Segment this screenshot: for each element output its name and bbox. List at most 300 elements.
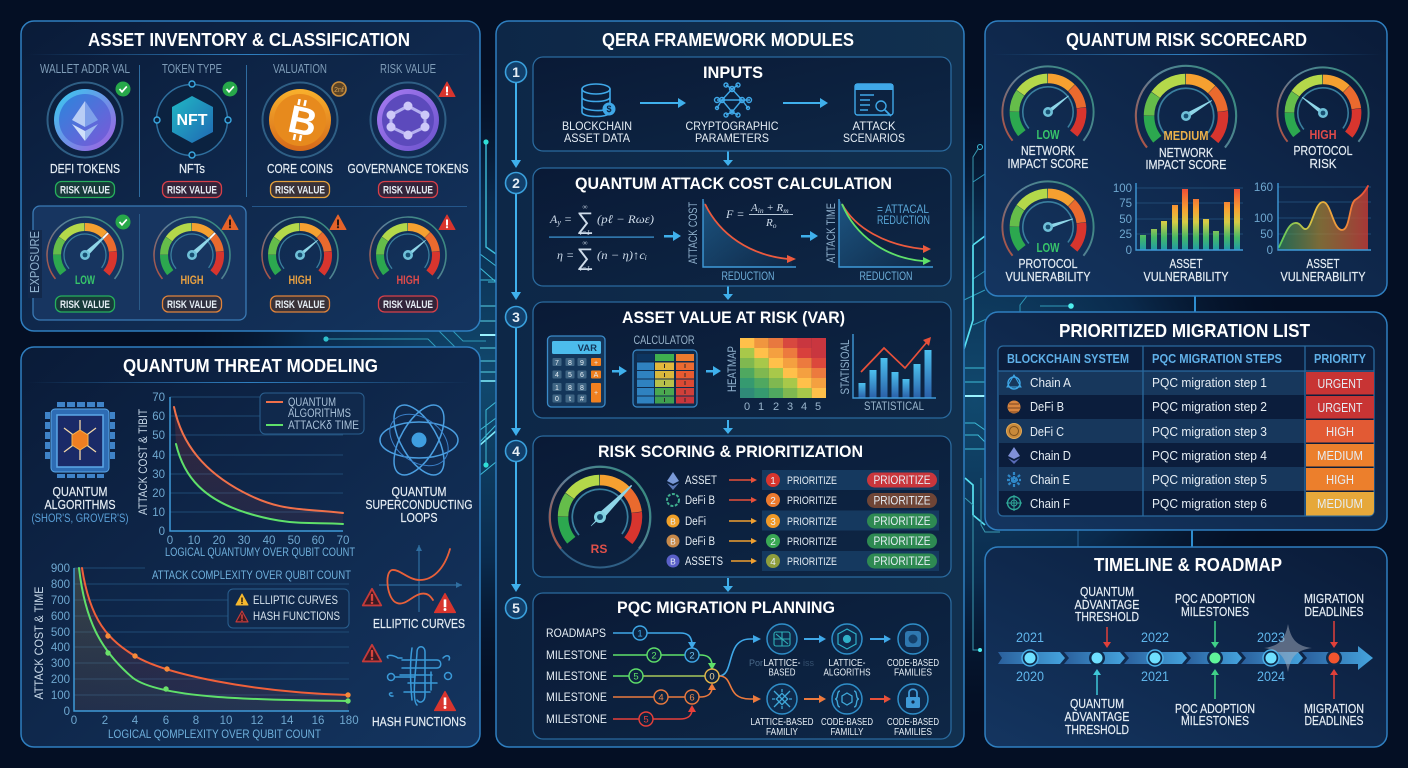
- milestone nodes: 2: [651, 650, 657, 662]
- icon: database: $: [606, 104, 612, 114]
- labels: [562, 119, 905, 145]
- chart: attack cost: o: [773, 221, 777, 230]
- milestone: quantum advantage threshold: THRESHOLD: [1075, 609, 1139, 624]
- gauge: protocol risk: [1259, 49, 1387, 177]
- row: chain d: [1008, 444, 1374, 466]
- row: chain a: PQC migration step 1: [1152, 375, 1267, 390]
- label: superconducting loops: SUPERCONDUCTING: [366, 497, 472, 512]
- row 1: PRIORITIZE: [787, 475, 837, 487]
- milestone: 2022-2021: 2022: [1141, 630, 1169, 645]
- chart: attack time: = ATTACAL: [877, 204, 930, 216]
- arrows: top row: [804, 635, 891, 643]
- milestone: quantum advantage threshold: ADVANTAGE: [1074, 597, 1140, 612]
- chart: attack complexity: 4: [132, 715, 139, 727]
- milestone: pqc adoption: MILESTONES: [1181, 713, 1249, 728]
- heading: TIMELINE & ROADMAP: [1094, 554, 1282, 575]
- label: superconducting loops: LOOPS: [400, 510, 438, 525]
- formula: =: [561, 212, 572, 226]
- formula: ∞: [582, 203, 588, 211]
- icon: calculator: 9: [580, 360, 584, 367]
- heatmap: 5: [815, 401, 821, 413]
- formula: ∞: [582, 239, 588, 247]
- legend: chart 2: ELLIPTIC CURVES: [253, 593, 338, 607]
- label: quantum algorithms: [32, 484, 128, 525]
- icon: calculator: A: [594, 372, 599, 379]
- icon: calculator: 4: [555, 372, 559, 379]
- gauge: protocol vulnerability: LOW: [1036, 241, 1060, 255]
- gauge: network impact low: IMPACT SCORE: [1008, 156, 1089, 171]
- milestone: migration deadlines: MIGRATION: [1304, 591, 1364, 606]
- chart: attack complexity: 0: [71, 715, 77, 727]
- module 5: pqc migration planning: [533, 593, 951, 739]
- chart: attack cost over qubit count: 30: [152, 469, 165, 481]
- milestone: quantum advantage threshold: THRESHOLD: [1065, 722, 1129, 737]
- chart: attack cost over qubit count: 40: [263, 535, 275, 547]
- heading: ASSET VALUE AT RISK (VAR): [622, 308, 845, 327]
- milestone: migration deadlines: MIGRATION: [1304, 701, 1364, 716]
- step numbers: 4: [512, 443, 520, 459]
- chart: attack complexity: 200: [51, 674, 70, 686]
- icon: elliptic curve: [363, 545, 462, 612]
- heading: PQC MIGRATION PLANNING: [617, 598, 835, 617]
- label: superconducting loops: QUANTUM: [392, 484, 446, 499]
- row: chain f: Chain F: [1030, 496, 1070, 511]
- labels: top row: [749, 658, 939, 678]
- icons: pqc families bottom row: [767, 684, 928, 714]
- chart: attack cost: A: [751, 202, 758, 214]
- gauge: high red: HIGH: [396, 273, 420, 287]
- row: defi c: [1006, 420, 1374, 442]
- formula: (pℓ − Rωε): [597, 212, 654, 226]
- chart: asset vulnerability bars: 100: [1113, 183, 1132, 195]
- heading: threat modeling: QUANTUM THREAT MODELING: [123, 355, 378, 376]
- chart: attack complexity: 180: [339, 715, 359, 727]
- row: chain e: HIGH: [1326, 472, 1354, 487]
- labels: PARAMETERS: [695, 131, 769, 145]
- table header: BLOCKCHAIN SYSTEM: [1007, 352, 1129, 366]
- labels: bottom row: LATTICE-BASED: [750, 717, 814, 728]
- icon: calculator: 7: [555, 360, 559, 367]
- milestone: pqc adoption: PQC ADOPTION: [1175, 591, 1255, 606]
- formula: A: [550, 212, 557, 226]
- statistical chart: STATISTICAL: [864, 401, 925, 413]
- icon: quantum chip: [45, 402, 115, 478]
- formula: ∑: [576, 208, 594, 235]
- chart: attack cost over qubit count: 40: [152, 450, 165, 462]
- step numbers: 1: [512, 64, 520, 80]
- row: defi b: [1008, 396, 1374, 418]
- milestone: 2023-2024: 2024: [1257, 669, 1285, 684]
- row 5: B: [670, 556, 676, 566]
- gauge: network impact medium: MEDIUM: [1164, 129, 1208, 143]
- chart: attack complexity: 800: [51, 579, 70, 591]
- gauge: protocol risk: PROTOCOL: [1294, 143, 1352, 158]
- icon: calculator: VAR: [578, 343, 597, 354]
- legend: chart 1: [260, 393, 364, 434]
- labels: ATTACK: [852, 119, 896, 133]
- milestone nodes: [629, 626, 719, 726]
- row: defi b: URGENT: [1318, 400, 1363, 415]
- row: chain d: MEDIUM: [1317, 448, 1363, 463]
- milestone: migration deadlines: DEADLINES: [1304, 713, 1364, 728]
- chart: asset vulnerability area: [1254, 182, 1371, 284]
- formula: ∑: [576, 244, 594, 271]
- asset names: GOVERNANCE TOKENS: [348, 161, 469, 176]
- chart: attack cost: R: [766, 217, 773, 229]
- module 4: risk scoring: [529, 436, 951, 588]
- statistical chart: STATISIOAL: [840, 339, 852, 394]
- chart: attack time: REDUCTION: [860, 271, 912, 283]
- legend: chart 1: ALGORITHMS: [288, 408, 351, 420]
- gauge: high orange: HIGH: [180, 273, 204, 287]
- legend: chart 1: ATTACKδ TIME: [288, 420, 359, 432]
- row 1: 1: [770, 476, 776, 487]
- chart: asset vulnerability area: 160: [1254, 182, 1273, 194]
- heading: qera framework: QERA FRAMEWORK MODULES: [602, 29, 854, 50]
- calculator table: [633, 335, 697, 407]
- milestone labels: MILESTONE: [546, 648, 607, 662]
- row 3: B: [670, 516, 676, 526]
- heading: asset inventory: ASSET INVENTORY & CLASSIFICATION: [88, 29, 410, 50]
- formula: i=1: [580, 229, 590, 237]
- table header: [1007, 352, 1367, 366]
- gauge: low: LOW: [75, 273, 95, 287]
- milestone: 2022-2021: 2021: [1141, 669, 1169, 684]
- row: chain f: PQC migration step 6: [1152, 496, 1267, 511]
- migration table: [998, 346, 1374, 516]
- chart: attack cost over qubit count: [136, 392, 356, 559]
- gauge: high: [247, 202, 353, 308]
- risk value pills row 2: RISK VALUE: [275, 299, 325, 311]
- icon: calculator: 6: [580, 372, 584, 379]
- milestone nodes: 4: [658, 692, 664, 704]
- legend: chart 2: HASH FUNCTIONS: [253, 609, 340, 623]
- chart: attack complexity: 8: [193, 715, 199, 727]
- heatmap: [727, 338, 826, 413]
- row 5: PRIORITIZE: [874, 556, 931, 568]
- chart: attack complexity: 300: [51, 658, 70, 670]
- row 5: [666, 554, 937, 568]
- labels: top row: iss: [803, 658, 814, 668]
- priority rows: [666, 470, 939, 571]
- formula: i=1: [580, 265, 590, 273]
- gauge: network impact medium: IMPACT SCORE: [1146, 157, 1227, 172]
- row 1: ASSET: [685, 475, 717, 487]
- module 3: asset value at risk: [533, 302, 951, 418]
- gauge: low: [32, 202, 138, 308]
- column labels: WALLET ADDR VAL: [40, 62, 130, 76]
- chart: attack cost over qubit count: 60: [312, 535, 324, 547]
- row: chain a: Chain A: [1030, 375, 1071, 390]
- row 5: ASSETS: [685, 556, 723, 568]
- chart: asset vulnerability area: VULNERABILITY: [1280, 269, 1366, 284]
- chart: attack cost over qubit count: 30: [238, 535, 250, 547]
- labels: top row: BASED: [768, 668, 796, 678]
- chart: asset vulnerability bars: 0: [1126, 245, 1132, 257]
- chart: attack cost over qubit count: 20: [213, 535, 225, 547]
- risk value pills row 2: RISK VALUE: [383, 299, 433, 311]
- chart: attack complexity: 6: [163, 715, 169, 727]
- chart: asset vulnerability bars: 25: [1119, 229, 1132, 241]
- icon: atom: [380, 397, 458, 483]
- icon: core coin: 2nf: [334, 87, 344, 94]
- arrow: [612, 366, 627, 376]
- circuit traces right gutter: [964, 144, 1195, 652]
- statistical chart: [840, 334, 936, 413]
- legend: chart 1: QUANTUM: [288, 397, 336, 409]
- chart: attack cost over qubit count: ATTACK COST & TIBIT: [136, 408, 150, 515]
- sparkle: [1264, 624, 1312, 672]
- legend: chart 2: [228, 589, 349, 628]
- row 4: B: [670, 536, 676, 546]
- arrow: [640, 98, 686, 108]
- row: chain f: MEDIUM: [1317, 496, 1363, 511]
- milestone: pqc adoption: MILESTONES: [1181, 604, 1249, 619]
- labels: bottom row: FAMILLY: [830, 727, 864, 738]
- formula: [549, 203, 654, 273]
- icon: calculator: 8: [580, 385, 584, 392]
- chart: attack cost over qubit count: LOGICAL QUANTUMY OVER QUBIT COUNT: [165, 545, 356, 559]
- chart: attack cost: + R: [764, 202, 784, 214]
- milestone labels: MILESTONE: [546, 690, 607, 704]
- icon: core coin: [262, 82, 346, 158]
- milestone: 2022-2021: [1141, 630, 1169, 684]
- labels: bottom row: FAMILIES: [894, 727, 932, 738]
- row 1: [667, 472, 937, 490]
- labels: top row: ALGORITHS: [824, 668, 871, 678]
- chart: attack cost over qubit count: 70: [152, 392, 165, 404]
- row: chain e: Chain E: [1030, 472, 1070, 487]
- asset names: [50, 161, 469, 176]
- milestone nodes: 1: [637, 628, 643, 640]
- formula: η =: [557, 248, 574, 262]
- column labels: [40, 62, 436, 76]
- icon: calculator: 8: [568, 360, 572, 367]
- row 4: 2: [770, 537, 776, 548]
- labels: top row: Por: [749, 658, 763, 668]
- icon: hash functions: [363, 645, 455, 710]
- chart: attack complexity: 900: [51, 563, 70, 575]
- row 5: 4: [770, 557, 776, 568]
- row 4: [666, 534, 937, 548]
- chart: attack complexity: 500: [51, 627, 70, 639]
- milestone: quantum advantage threshold: ADVANTAGE: [1064, 709, 1130, 724]
- risk score gauge: RS: [591, 542, 607, 556]
- label: quantum algorithms: ALGORITHMS: [44, 497, 116, 512]
- milestone: pqc adoption: PQC ADOPTION: [1175, 701, 1255, 716]
- calculator table: CALCULATOR: [634, 335, 694, 347]
- row: defi c: PQC migration step 3: [1152, 424, 1267, 439]
- chart: asset vulnerability bars: 50: [1119, 214, 1132, 226]
- risk score gauge: [529, 446, 671, 588]
- row: chain a: URGENT: [1318, 376, 1363, 391]
- chart: attack cost over qubit count: 60: [152, 411, 165, 423]
- gauge: network impact low: LOW: [1036, 128, 1060, 142]
- row 2: 2: [770, 496, 776, 507]
- chart: attack complexity: 16: [312, 715, 324, 727]
- gauge: high orange: [139, 202, 245, 308]
- chart: attack complexity: 600: [51, 611, 70, 623]
- chart: attack cost: F =: [725, 207, 744, 221]
- labels: top row: LATTICE-: [764, 658, 800, 669]
- gauge: high red: [355, 202, 461, 308]
- milestone labels: ROADMAPS: [546, 626, 606, 640]
- step numbers: 2: [512, 175, 520, 191]
- column labels: RISK VALUE: [380, 62, 436, 76]
- heatmap: 4: [801, 401, 807, 413]
- milestone nodes: 0: [709, 672, 715, 682]
- gauge: high: HIGH: [288, 273, 312, 287]
- labels: BLOCKCHAIN: [562, 119, 632, 133]
- row: defi b: DeFi B: [1030, 399, 1064, 414]
- heatmap: 0: [744, 401, 750, 413]
- chart: attack time: REDUCTION: [877, 215, 930, 227]
- icon: calculator: t: [569, 396, 571, 403]
- milestone: 2020-2021: 2021: [1016, 630, 1044, 645]
- milestone: quantum advantage threshold: QUANTUM: [1080, 584, 1134, 599]
- icons: pqc families top row: [767, 624, 928, 654]
- chart: attack complexity: 14: [281, 715, 294, 727]
- icon: calculator: #: [580, 396, 584, 403]
- labels: CRYPTOGRAPHIC: [686, 119, 779, 133]
- icon: governance token: [370, 82, 455, 158]
- icon: calculator: 8: [568, 385, 572, 392]
- label: elliptic curves: ELLIPTIC CURVES: [373, 616, 465, 631]
- row: chain f: [1006, 492, 1374, 516]
- chart: asset vulnerability bars: VULNERABILITY: [1144, 269, 1229, 284]
- chart: attack complexity: ATTACK COST & TIME: [32, 586, 46, 700]
- exposure box: [27, 206, 246, 320]
- row 2: DeFi B: [685, 495, 715, 507]
- panel: quantum risk scorecard: [984, 21, 1387, 296]
- gauge: network impact medium: NETWORK: [1159, 145, 1213, 160]
- labels: top row: FAMILIES: [894, 668, 932, 678]
- row 3: 3: [770, 517, 776, 528]
- heatmap: 3: [787, 401, 793, 413]
- formula: (n − η)↑cᵢ: [597, 248, 647, 262]
- chart: attack cost over qubit count: 0: [167, 535, 173, 547]
- chart: attack cost over qubit count: 50: [288, 535, 300, 547]
- chart: attack cost over qubit count: 0: [159, 526, 165, 538]
- chart: attack cost: REDUCTION: [722, 271, 774, 283]
- heatmap: HEATMAP: [727, 346, 739, 392]
- icon: nft: NFT: [176, 112, 208, 129]
- label: hash functions: HASH FUNCTIONS: [372, 714, 466, 729]
- milestone nodes: 2: [689, 650, 695, 662]
- chart: attack complexity: 700: [51, 595, 70, 607]
- labels: top row: CODE-BASED: [887, 658, 939, 669]
- icon: calculator: 0: [555, 396, 559, 403]
- panel: quantum threat modeling: [21, 347, 480, 747]
- exposure box: EXPOSURE: [27, 231, 42, 293]
- icon: core coin: B: [284, 98, 321, 146]
- row 2: PRIORITIZE: [874, 496, 931, 508]
- labels: bottom row: CODE-BASED: [821, 717, 873, 728]
- panel: prioritized migration list: [985, 312, 1387, 530]
- heading: QUANTUM RISK SCORECARD: [1066, 29, 1307, 50]
- icon: calculator: [548, 336, 605, 407]
- row 4: PRIORITIZE: [874, 536, 931, 548]
- chart: attack cost over qubit count: 70: [337, 535, 349, 547]
- risk value pills row 1: RISK VALUE: [167, 184, 217, 196]
- circuit traces left gutter: [323, 139, 496, 475]
- gauge: protocol risk: HIGH: [1310, 128, 1336, 142]
- icon: nft: [154, 81, 238, 158]
- row: defi c: DeFi C: [1030, 424, 1064, 439]
- row: chain e: [1007, 468, 1374, 490]
- icon: calculator: 1: [555, 385, 559, 392]
- arrow: [801, 231, 818, 241]
- gauge: protocol risk: RISK: [1310, 156, 1337, 171]
- risk value pills row 2: RISK VALUE: [60, 299, 110, 311]
- chart: attack cost over qubit count: 20: [152, 488, 165, 500]
- step numbers: 3: [512, 309, 520, 325]
- labels: ASSET DATA: [564, 131, 630, 145]
- icon: attack scenarios window: [855, 84, 893, 116]
- row 3: PRIORITIZE: [787, 516, 837, 528]
- milestone nodes: 6: [689, 692, 695, 704]
- chart: attack complexity: 2: [102, 715, 108, 727]
- milestone: migration deadlines: [1304, 591, 1364, 728]
- chart: asset vulnerability bars: 75: [1119, 198, 1132, 210]
- chart: attack time: ATTACK TIME: [826, 203, 838, 263]
- heatmap: 1: [758, 401, 764, 413]
- row: chain e: PQC migration step 5: [1152, 472, 1267, 487]
- chart: asset vulnerability bars: ASSET: [1170, 256, 1203, 271]
- milestone: 2023-2024: 2023: [1257, 630, 1285, 645]
- panel: timeline & roadmap: [985, 547, 1387, 747]
- gauge: network impact medium: [1115, 45, 1257, 187]
- chart: attack complexity: 10: [220, 715, 232, 727]
- arrow: [664, 231, 681, 241]
- risk value pills row 2: [56, 296, 438, 312]
- step numbers: 5: [512, 600, 520, 616]
- asset names: DEFI TOKENS: [50, 161, 120, 176]
- risk value pills row 1: RISK VALUE: [275, 184, 325, 196]
- milestone: quantum advantage threshold: [1064, 584, 1140, 737]
- milestone: 2020-2021: 2020: [1016, 669, 1044, 684]
- gauge: protocol vulnerability: PROTOCOL: [1018, 256, 1078, 271]
- milestone nodes: 5: [643, 714, 649, 726]
- icon: database: [582, 84, 616, 116]
- row 4: DeFi B: [685, 536, 715, 548]
- row 1: PRIORITIZE: [874, 475, 931, 487]
- icon: network: [714, 83, 752, 117]
- timeline bar: [998, 646, 1373, 670]
- heading: RISK SCORING & PRIORITIZATION: [598, 442, 863, 461]
- row: chain d: Chain D: [1030, 448, 1071, 463]
- chart: attack complexity: LOGICAL QOMPLEXITY OVER QUBIT COUNT: [108, 727, 322, 741]
- label: superconducting loops: [366, 484, 472, 525]
- chart: asset vulnerability area: 0: [1267, 245, 1273, 257]
- chart: attack cost: m: [783, 206, 789, 215]
- column labels: VALUATION: [273, 62, 327, 76]
- chart: attack cost over qubit count: 50: [152, 430, 165, 442]
- icon: defi token: [48, 82, 130, 158]
- heatmap: 2: [773, 401, 779, 413]
- chart: attack complexity: 0: [64, 706, 70, 718]
- chart: asset vulnerability bars: [1113, 183, 1243, 284]
- table header: PRIORITY: [1314, 352, 1367, 366]
- milestone: 2023-2024: [1257, 630, 1285, 684]
- milestone: quantum advantage threshold: QUANTUM: [1070, 696, 1124, 711]
- arrow: [783, 98, 828, 108]
- row: defi b: PQC migration step 2: [1152, 399, 1267, 414]
- gauge: protocol vulnerability: [984, 163, 1112, 291]
- labels: SCENARIOS: [843, 131, 905, 145]
- chart: attack cost: [688, 199, 796, 283]
- arrows: bottom row: [804, 695, 891, 703]
